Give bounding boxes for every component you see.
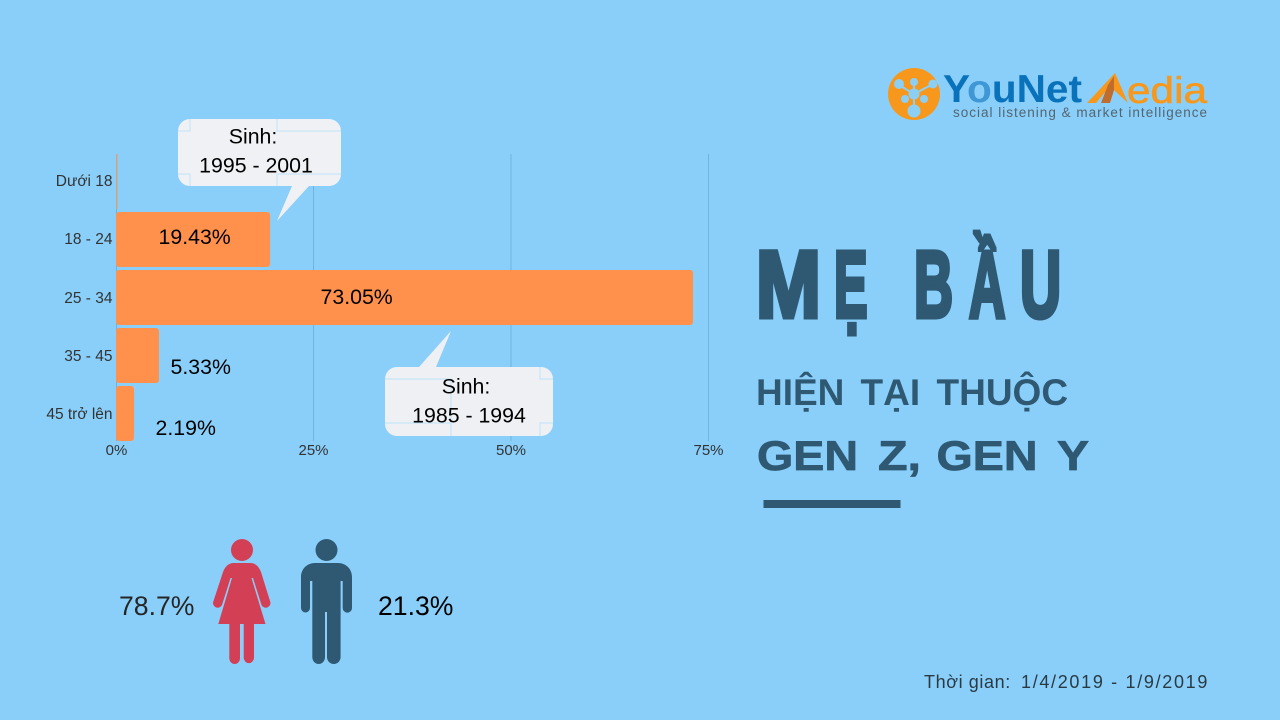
bar value labels: 73.05% bbox=[320, 285, 393, 309]
category labels: 25 - 34 bbox=[64, 290, 113, 307]
bar value labels bbox=[156, 225, 393, 440]
subheading: Hiện tại thuộc: THUỘC bbox=[936, 371, 1068, 413]
axis labels: 25% bbox=[298, 442, 329, 459]
title: Mẹ bầu: B bbox=[914, 232, 953, 338]
title: Mẹ bầu: Ầ bbox=[969, 232, 1005, 338]
logo wordmark edia: edia bbox=[1127, 70, 1207, 111]
icon: woman bbox=[213, 539, 270, 664]
subheading: Hiện tại thuộc: HIỆN bbox=[756, 371, 855, 413]
female share bbox=[119, 539, 270, 664]
chart grid lines bbox=[116, 154, 708, 441]
title: Mẹ bầu: U bbox=[1020, 232, 1061, 338]
logo: YouNet Media bbox=[888, 68, 1207, 120]
underline accent bbox=[764, 500, 900, 508]
axis labels: 0% bbox=[106, 442, 127, 459]
date range note: 1/4/2019 - 1/9/2019 bbox=[1021, 672, 1209, 692]
subheading: Gen Z, Gen Y: Z, bbox=[878, 432, 921, 479]
bar: 18 - 24 bbox=[116, 212, 270, 267]
male share bbox=[301, 539, 453, 664]
bar chart: age distribution bbox=[46, 154, 724, 459]
callout: Sinh 1985 - 1994: 1985 - 1994 bbox=[412, 404, 526, 428]
date range note: Thời gian: bbox=[924, 672, 1016, 692]
callout: Sinh 1985 - 1994 bbox=[385, 331, 553, 436]
bar value labels: 19.43% bbox=[158, 225, 231, 249]
title: Mẹ bầu: Ẹ bbox=[834, 232, 867, 338]
subheading: Gen Z, Gen Y: GEN bbox=[757, 432, 858, 479]
category labels: 18 - 24 bbox=[64, 231, 113, 248]
logo tagline: social listening & market intelligence bbox=[953, 105, 1207, 120]
category labels bbox=[46, 173, 113, 423]
axis labels bbox=[106, 442, 724, 459]
bar: 35 - 45 bbox=[116, 328, 159, 383]
bar value labels: 5.33% bbox=[170, 355, 231, 379]
callout: Sinh 1995 - 2001: 1995 - 2001 bbox=[199, 154, 313, 178]
category labels: 35 - 45 bbox=[64, 348, 112, 365]
subheading: Gen Z, Gen Y: GEN bbox=[936, 432, 1038, 479]
callout: Sinh 1995 - 2001: Sinh: bbox=[229, 124, 277, 148]
bar value labels: 2.19% bbox=[156, 416, 216, 440]
bar: 25 - 34 bbox=[116, 270, 693, 325]
bar: Dưới 18 bbox=[116, 154, 118, 209]
label: 21.3%: 21.3% bbox=[378, 591, 453, 621]
category labels: 45 trở lên bbox=[46, 406, 112, 423]
title: Mẹ bầu: M bbox=[756, 232, 820, 338]
callout: Sinh 1995 - 2001 bbox=[178, 119, 341, 221]
callout: Sinh 1985 - 1994: Sinh: bbox=[442, 374, 490, 398]
bar: 45 trở lên bbox=[116, 386, 134, 441]
axis labels: 50% bbox=[496, 442, 526, 459]
logo mark: mountain M bbox=[1087, 73, 1128, 103]
label: 78.7%: 78.7% bbox=[119, 591, 194, 621]
subheading: Gen Z, Gen Y: Y bbox=[1057, 432, 1089, 479]
category labels: Dưới 18 bbox=[56, 173, 112, 190]
icon: man bbox=[301, 539, 352, 664]
axis labels: 75% bbox=[693, 442, 724, 459]
subheading: Hiện tại thuộc: TẠI bbox=[860, 372, 930, 413]
icon: network circle bbox=[888, 68, 940, 120]
logo wordmark YouNet: YouNet bbox=[943, 68, 1082, 111]
